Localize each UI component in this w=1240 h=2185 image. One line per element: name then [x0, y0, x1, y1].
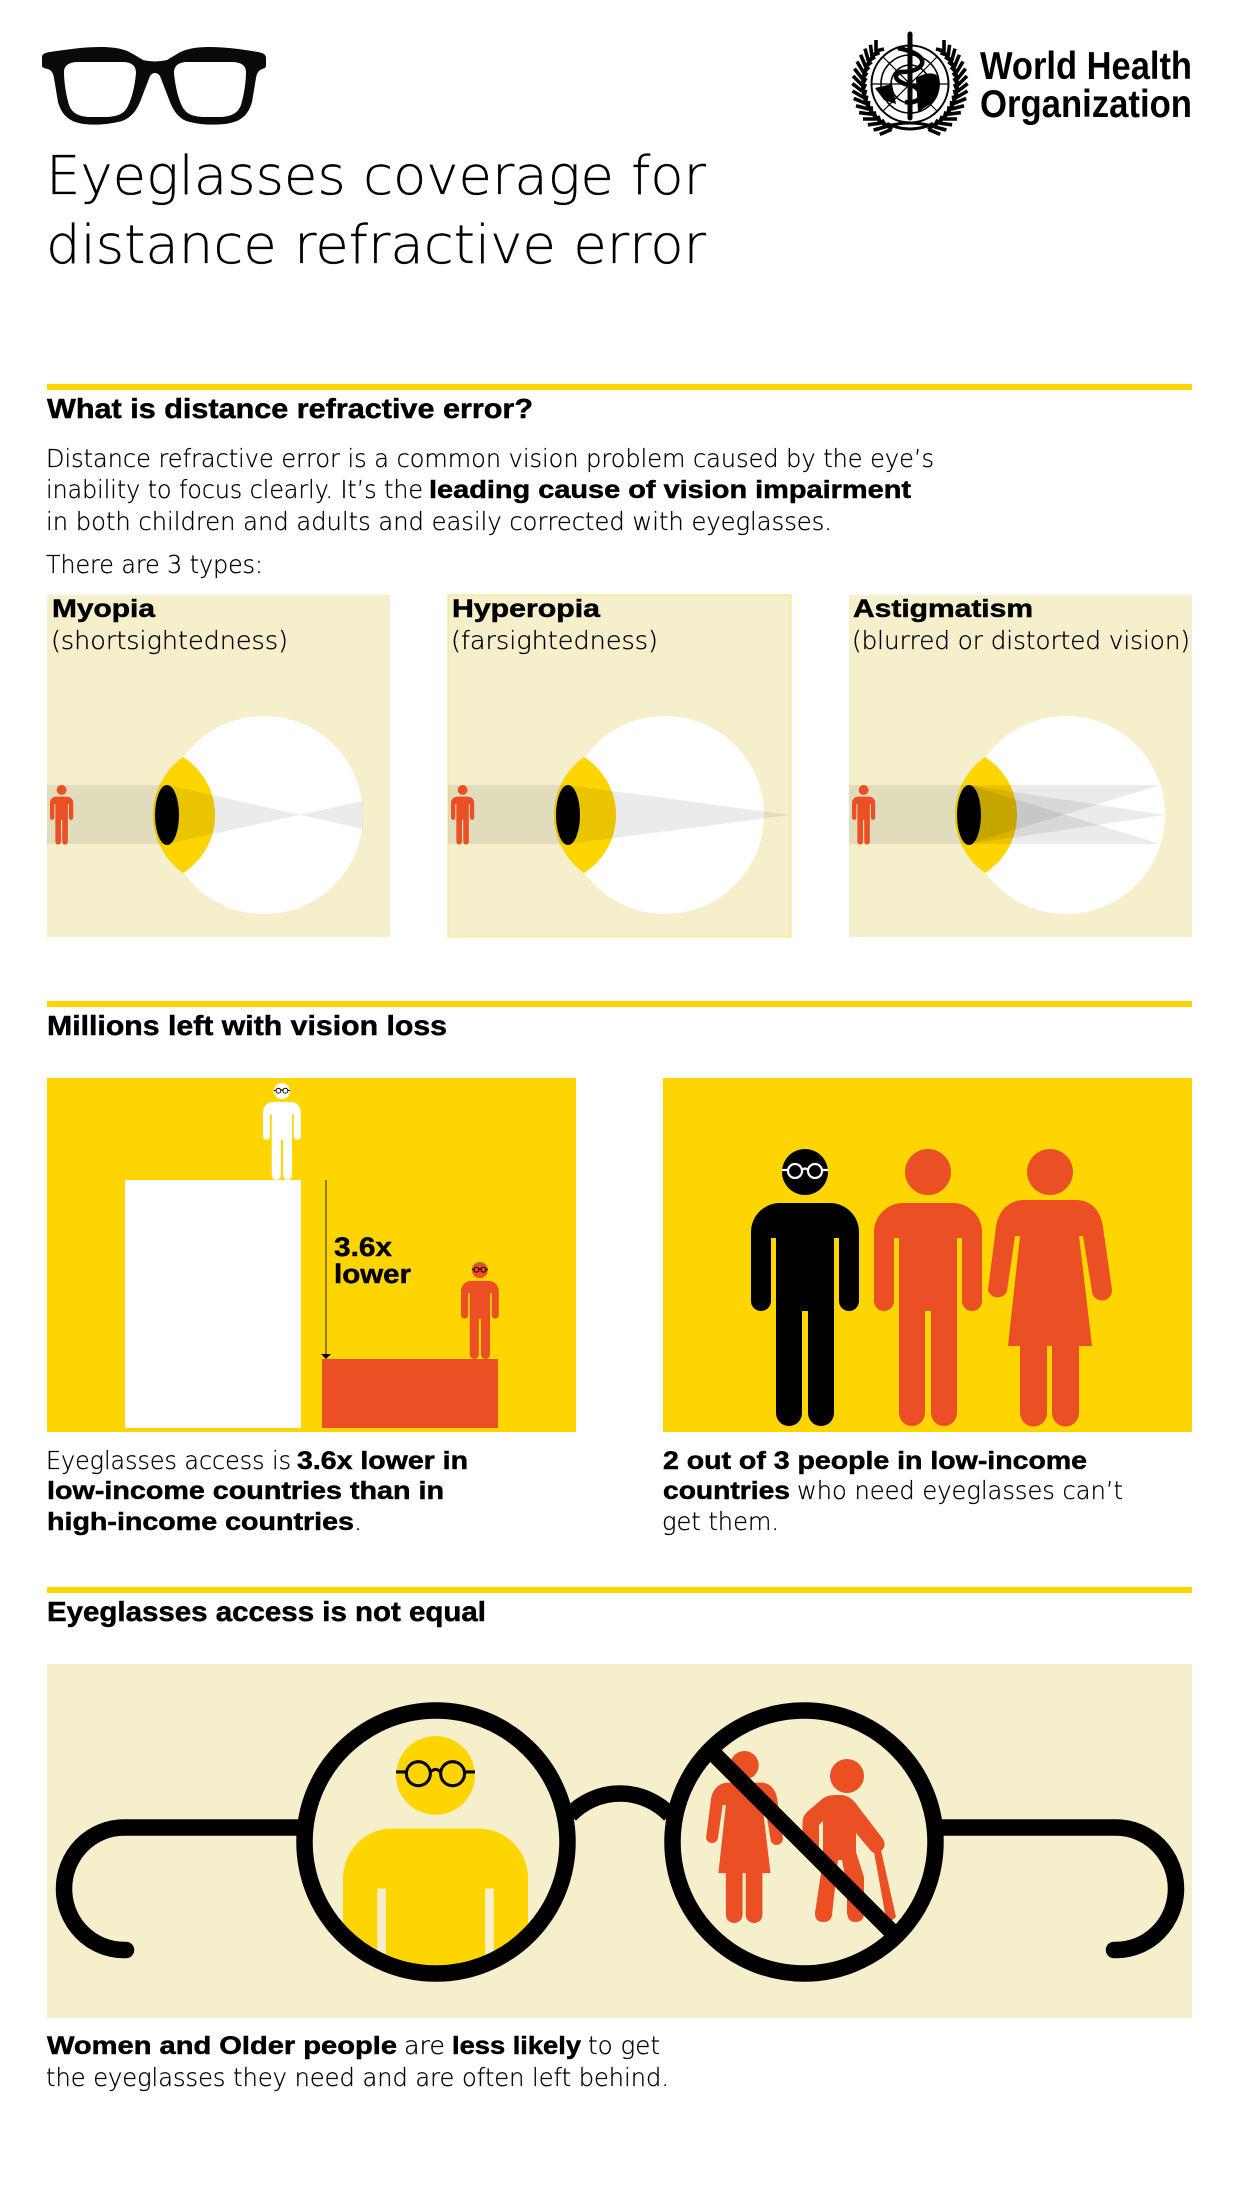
panel: hyperopia [448, 595, 791, 937]
text block: definition: inability to focus clearly. It’s the [46, 475, 423, 504]
panel: myopia [47, 595, 390, 937]
eye diagram: hyperopia [448, 716, 790, 914]
figure: orange person with glasses [461, 1262, 499, 1359]
caption: women and older people: are [404, 2031, 445, 2060]
icon: person [852, 785, 875, 845]
text block: definition: Distance refractive error is a common vision problem caused by the eye’s [46, 444, 934, 473]
title: distance refractive error [46, 213, 706, 276]
panel: eyeglasses illustration [47, 1664, 1192, 2018]
label: 3.6x lower: lower [334, 1259, 412, 1289]
panel subheading: farsightedness: (farsightedness) [451, 626, 658, 655]
figure: white person with glasses [263, 1083, 301, 1180]
heading: eyeglasses access is not equal: Eyeglasses access is not equal [47, 1596, 486, 1627]
text block: definition: leading cause of vision impairment [429, 476, 912, 504]
panel heading: hyperopia: Hyperopia [452, 595, 601, 623]
caption: 2 out of 3 people: who need eyeglasses can’t [797, 1476, 1123, 1505]
caption: women and older people [46, 2031, 669, 2092]
caption: eyeglasses access is 3.6x lower: low-income countries than in [47, 1477, 444, 1505]
figure: orange woman [988, 1149, 1112, 1426]
caption: eyeglasses access is 3.6x lower: . [354, 1507, 362, 1536]
panel: astigmatism [849, 595, 1192, 937]
text: there are 3 types: There are 3 types: [46, 550, 263, 579]
logo emblem [847, 34, 973, 137]
caption: women and older people: Women and Older people [47, 2032, 397, 2060]
heading: what is distance refractive error: What is distance refractive error? [47, 393, 533, 424]
caption: women and older people: to get [588, 2031, 660, 2060]
eye diagram: myopia [47, 716, 363, 914]
icon: black eyeglasses [42, 47, 266, 125]
figure: orange man [874, 1149, 982, 1426]
icon: person [451, 785, 474, 845]
panel subheading: shortsightedness: (shortsightedness) [51, 626, 288, 655]
bar: high-income countries [125, 1180, 301, 1428]
heading: millions left with vision loss: Millions left with vision loss [47, 1010, 447, 1041]
caption: eyeglasses access is 3.6x lower: 3.6x lower in [297, 1447, 468, 1475]
panel heading: myopia: Myopia [52, 595, 156, 623]
icon: person [50, 785, 73, 845]
logo wordmark line 1: World Health [980, 45, 1192, 88]
arrow: downward difference [321, 1180, 331, 1359]
figure: woman inside right lens [706, 1751, 783, 1923]
caption: women and older people: less likely [452, 2032, 581, 2060]
bar: low-income countries [322, 1359, 498, 1428]
caption: women and older people: the eyeglasses they need and are often left behind. [46, 2063, 669, 2092]
title [46, 144, 706, 276]
text block: definition: in both children and adults and easily corrected with eyeglasses. [46, 507, 832, 536]
icon: spectacles frame [64, 1710, 1176, 1974]
caption: 2 out of 3 people [662, 1447, 1123, 1536]
text block: definition [46, 444, 934, 536]
title: Eyeglasses coverage for [46, 144, 706, 207]
caption: eyeglasses access is 3.6x lower [46, 1446, 468, 1536]
caption: 2 out of 3 people: 2 out of 3 people in low-income [663, 1447, 1087, 1475]
label: 3.6x lower [334, 1232, 412, 1289]
logo: World Health Organization [847, 34, 1192, 137]
caption: 2 out of 3 people: countries [663, 1477, 790, 1505]
panel subheading: blurred or distorted vision: (blurred or distorted vision) [852, 626, 1190, 655]
panel: access bar comparison [47, 1078, 576, 1432]
caption: eyeglasses access is 3.6x lower: high-income countries [47, 1508, 354, 1536]
caption: eyeglasses access is 3.6x lower: Eyeglasses access is [46, 1446, 291, 1475]
panel heading: astigmatism: Astigmatism [853, 595, 1033, 623]
figure: older person with cane [802, 1759, 896, 1922]
panel: 2 out of 3 people [663, 1078, 1192, 1432]
caption: 2 out of 3 people: get them. [662, 1507, 779, 1536]
logo wordmark line 2: Organization [980, 83, 1192, 126]
figure: black man with glasses [751, 1149, 859, 1426]
figure: man with glasses inside left lens [343, 1736, 528, 1966]
label: 3.6x lower: 3.6x [334, 1232, 392, 1262]
eye diagram: astigmatism [849, 716, 1165, 914]
